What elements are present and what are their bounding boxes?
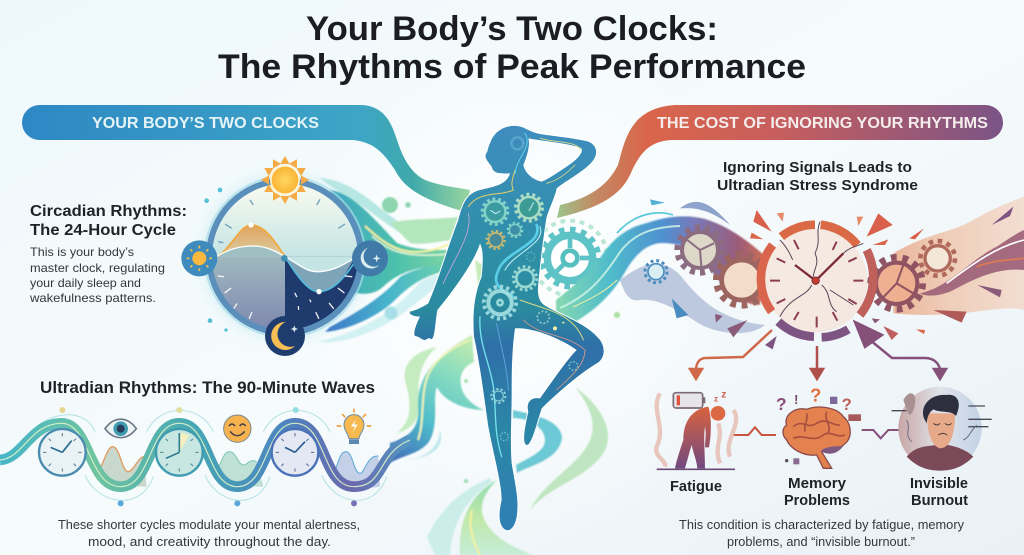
wave highlight line <box>0 423 410 487</box>
left banner: your body's two clocks <box>22 105 470 212</box>
icon: fatigue figure: z <box>714 394 718 403</box>
text: ultradian description: These shorter cycles modulate your mental alertness, <box>58 518 360 532</box>
icon: fatigue figure <box>656 389 736 469</box>
wave nodes <box>59 407 357 506</box>
icon: burnout portrait <box>892 387 992 471</box>
title <box>218 10 806 86</box>
text: circadian description <box>29 245 165 305</box>
body silhouette <box>410 126 604 530</box>
text: circadian description: your daily sleep and <box>30 276 141 290</box>
text: condition description: problems, and “invisible burnout.” <box>727 535 915 549</box>
icon: large teal gear near body <box>533 221 607 295</box>
fatigue, memory and burnout icons <box>656 385 992 471</box>
connector: memory to burnout <box>862 430 902 438</box>
icon: sun badge left <box>181 240 217 276</box>
right banner: the cost of ignoring your rhythms <box>557 105 1003 218</box>
broken clock illustration <box>645 197 1024 349</box>
symptom labels: Burnout <box>911 493 968 509</box>
arrow: to fatigue <box>690 330 772 379</box>
icon: sun at top <box>261 156 309 204</box>
clock rim <box>209 181 361 333</box>
arrows from clock to symptoms <box>690 322 946 379</box>
shattered shards <box>650 199 1013 349</box>
symptom labels: Fatigue <box>670 479 722 495</box>
text: circadian description: master clock, regulating <box>30 261 165 275</box>
human body figure with gears and energy lines <box>410 126 604 530</box>
connector: fatigue to memory <box>733 427 776 435</box>
heading: ultradian stress syndrome: Ultradian Stress Syndrome <box>717 178 918 194</box>
icon: brain with question marks: ? <box>842 395 852 414</box>
icon: brain with question marks: ? <box>810 385 821 406</box>
text: circadian description: This is your body’s <box>30 245 134 259</box>
heading: circadian rhythms <box>30 203 187 239</box>
icon: eye <box>105 419 136 438</box>
clock 2 <box>156 429 203 476</box>
24-hour clock illustration <box>181 156 388 356</box>
gears around broken clock <box>645 227 955 309</box>
pale lilac ribbon <box>620 264 765 333</box>
left banner: your body's two clocks: YOUR BODY’S TWO CLOCKS <box>92 115 319 132</box>
heading: ultradian stress syndrome <box>717 160 918 194</box>
peach ribbons right of clock <box>893 197 1024 315</box>
title: The Rhythms of Peak Performance <box>218 48 806 86</box>
wave ribbon <box>0 423 410 487</box>
left flowing ribbons behind clock <box>318 178 490 342</box>
icon: light bulb <box>337 409 371 444</box>
right banner: the cost of ignoring your rhythms: THE COST OF IGNORING YOUR RHYTHMS <box>657 115 988 132</box>
symptom labels <box>670 476 968 509</box>
symptom labels: Memory <box>788 476 846 492</box>
symptom labels: Invisible <box>910 476 968 492</box>
icon: fatigue figure: z <box>721 389 726 400</box>
wave halo arcs <box>30 410 387 500</box>
icon: moon badge right <box>352 240 388 276</box>
symptom labels: Problems <box>784 493 850 509</box>
icon: brain with question marks <box>776 385 861 468</box>
heading: ultradian rhythms: Ultradian Rhythms: The 90-Minute Waves <box>40 379 375 397</box>
title: Your Body’s Two Clocks: <box>306 10 718 48</box>
icon: brain with question marks: ? <box>776 394 787 414</box>
heading: ultradian stress syndrome: Ignoring Signals Leads to <box>723 160 912 176</box>
icon: brain with question marks: ! <box>794 392 798 407</box>
body gears <box>482 137 578 441</box>
text: ultradian description: mood, and creativity throughout the day. <box>88 535 331 549</box>
clock 3 <box>272 429 318 476</box>
accent shard ribbon left of clock <box>680 202 730 225</box>
text: condition description <box>679 518 965 549</box>
text: ultradian description <box>58 518 360 549</box>
arrow: to memory problems <box>811 346 823 379</box>
heading: circadian rhythms: The 24-Hour Cycle <box>30 222 176 239</box>
text: circadian description: wakefulness patterns. <box>29 291 156 305</box>
energy lines inside body <box>443 133 585 457</box>
clock cracks <box>780 222 863 317</box>
icon: moon badge bottom <box>265 316 305 356</box>
clock ticks and hands <box>770 240 863 327</box>
lower flowing ribbons around legs <box>390 312 620 555</box>
mini hills between clocks <box>97 447 380 488</box>
blue to purple ribbon <box>556 216 765 330</box>
clock 1 <box>39 429 86 476</box>
text: condition description: This condition is characterized by fatigue, memory <box>679 518 965 532</box>
ultradian wave illustration <box>0 407 410 506</box>
icon: smiley <box>224 415 251 442</box>
heading: circadian rhythms: Circadian Rhythms: <box>30 203 187 220</box>
clock rim segments <box>761 225 873 337</box>
clock dial <box>764 229 867 332</box>
clock face <box>207 178 363 335</box>
right flowing ribbon and background gears <box>533 213 765 333</box>
arrow: to invisible burnout <box>855 322 946 379</box>
